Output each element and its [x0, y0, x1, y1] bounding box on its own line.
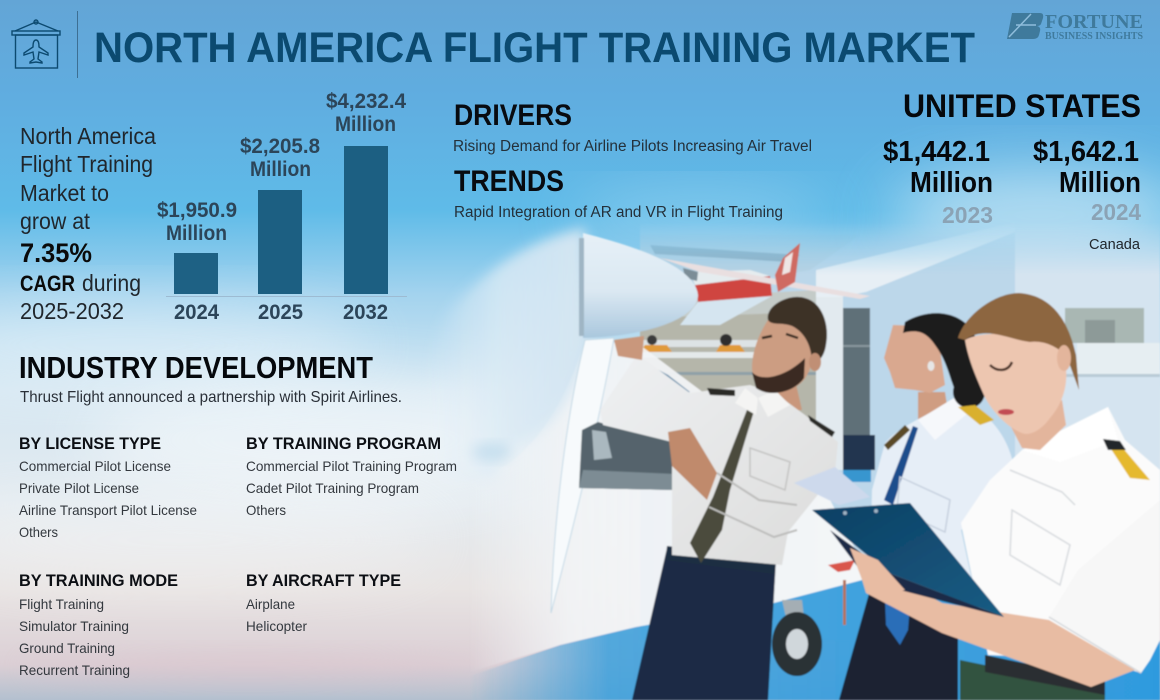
- clipboard: [812, 503, 1004, 617]
- regional stats: United States: UNITED STATES: [903, 88, 1141, 124]
- segment: by license type: Commercial Pilot License: [19, 458, 171, 474]
- text: CAGR statement: grow at: [20, 208, 91, 234]
- industry development: [19, 350, 402, 406]
- segment: by training mode: Flight Training: [19, 596, 104, 612]
- background airplane: [660, 243, 870, 325]
- stat 2024: Million: [1059, 167, 1141, 199]
- segment: by license type: [19, 435, 197, 540]
- segment: by license type: Others: [19, 524, 58, 540]
- cockpit window: [579, 422, 675, 490]
- bar 2032: $4,232.4: [326, 90, 406, 113]
- trends: [454, 165, 783, 221]
- industry development: INDUSTRY DEVELOPMENT: [19, 350, 373, 385]
- segment: by training mode: Ground Training: [19, 640, 115, 656]
- text: CAGR statement: 7.35%: [20, 238, 92, 268]
- red tag: [828, 560, 855, 625]
- hand on clipboard: [850, 548, 905, 595]
- text: CAGR statement: [20, 123, 156, 324]
- text: CAGR statement: North America: [20, 123, 156, 149]
- propeller blade: [551, 338, 614, 613]
- industry development: Thrust Flight announced a partnership with Spirit Airlines.: [20, 389, 402, 406]
- stat 2023: $1,442.1: [883, 136, 990, 168]
- icon: flight training board: [12, 20, 60, 68]
- logo: Fortune Business Insights: FORTUNE: [1045, 11, 1143, 33]
- trends: Rapid Integration of AR and VR in Flight Training: [454, 204, 783, 221]
- bar 2025: $2,205.8: [240, 135, 320, 158]
- bar 2032: 2032: [343, 301, 388, 324]
- segment: by aircraft type: Airplane: [246, 596, 295, 612]
- segment: by aircraft type: BY AIRCRAFT TYPE: [246, 572, 401, 590]
- tablet: [794, 467, 870, 505]
- bar 2032: Million: [335, 113, 396, 136]
- logo: Fortune Business Insights: BUSINESS INSIGHTS: [1045, 31, 1143, 42]
- text: CAGR statement: Flight Training: [20, 151, 153, 177]
- background: clouds: [0, 170, 1160, 682]
- aircraft fuselage: [470, 340, 870, 672]
- segment: by training mode: Recurrent Training: [19, 662, 130, 678]
- icon: airplane glyph: [24, 40, 48, 63]
- photo: pilots inspecting aircraft in a hangar: [429, 222, 1160, 700]
- orange stands: [640, 334, 745, 352]
- segment: by license type: Private Pilot License: [19, 480, 139, 496]
- text: CAGR statement: 2025-2032: [20, 298, 124, 324]
- text: CAGR statement: Market to: [20, 180, 109, 206]
- text: CAGR statement: during: [82, 270, 141, 296]
- segment: by training mode: Simulator Training: [19, 618, 129, 634]
- stat 2023: 2023: [942, 202, 993, 228]
- bar chart: market size: [157, 90, 407, 324]
- segment: by training program: BY TRAINING PROGRAM: [246, 435, 441, 453]
- segment: by aircraft type: Helicopter: [246, 618, 307, 634]
- bar 2025: Million: [250, 158, 311, 181]
- aircraft cowling: [429, 228, 590, 480]
- bar 2024: $1,950.9: [157, 199, 237, 222]
- segment: by training program: [246, 435, 457, 518]
- segment: by training program: Commercial Pilot Training Program: [246, 458, 457, 474]
- stat 2024: 2024: [1091, 199, 1141, 225]
- trends: TRENDS: [454, 165, 564, 198]
- drivers: DRIVERS: [454, 99, 572, 132]
- bar 2032: [326, 90, 406, 324]
- wing strut: [640, 360, 690, 395]
- segment: by training mode: BY TRAINING MODE: [19, 572, 178, 590]
- drivers: [453, 99, 812, 155]
- segment: by training mode: [19, 572, 178, 678]
- propeller spinner: [579, 233, 698, 338]
- pilot three: woman with clipboard: [854, 293, 1160, 700]
- pilot two: woman with tablet: [839, 313, 1016, 700]
- stat 2024: $1,642.1: [1033, 136, 1139, 168]
- bar 2025: [240, 135, 320, 324]
- drivers: Rising Demand for Airline Pilots Increasing Air Travel: [453, 138, 812, 155]
- stat 2024: [1033, 136, 1141, 225]
- segment: by training program: Cadet Pilot Training Program: [246, 480, 419, 496]
- stat 2023: [883, 136, 993, 228]
- logo: Fortune Business Insights: [1007, 11, 1143, 42]
- bar 2024: 2024: [174, 301, 219, 324]
- segment: by license type: Airline Transport Pilot License: [19, 502, 197, 518]
- regional stats: United States: [883, 88, 1141, 253]
- bar 2024: Million: [166, 222, 227, 245]
- label: Canada: Canada: [1089, 236, 1141, 253]
- segment: by training program: Others: [246, 502, 286, 518]
- hangar interior: [640, 222, 1160, 642]
- bar 2025: 2025: [258, 301, 303, 324]
- pilot one: man: [600, 297, 838, 700]
- segment: by aircraft type: [246, 572, 401, 634]
- bar 2024: [157, 199, 237, 324]
- landing gear wheel: [772, 600, 822, 676]
- text: CAGR statement: CAGR: [20, 271, 75, 296]
- title: NORTH AMERICA FLIGHT TRAINING MARKET: [94, 24, 975, 72]
- segment: by license type: BY LICENSE TYPE: [19, 435, 161, 453]
- stat 2023: Million: [910, 167, 993, 199]
- cowling shadow: [472, 443, 512, 461]
- hangar floor: [470, 578, 1160, 700]
